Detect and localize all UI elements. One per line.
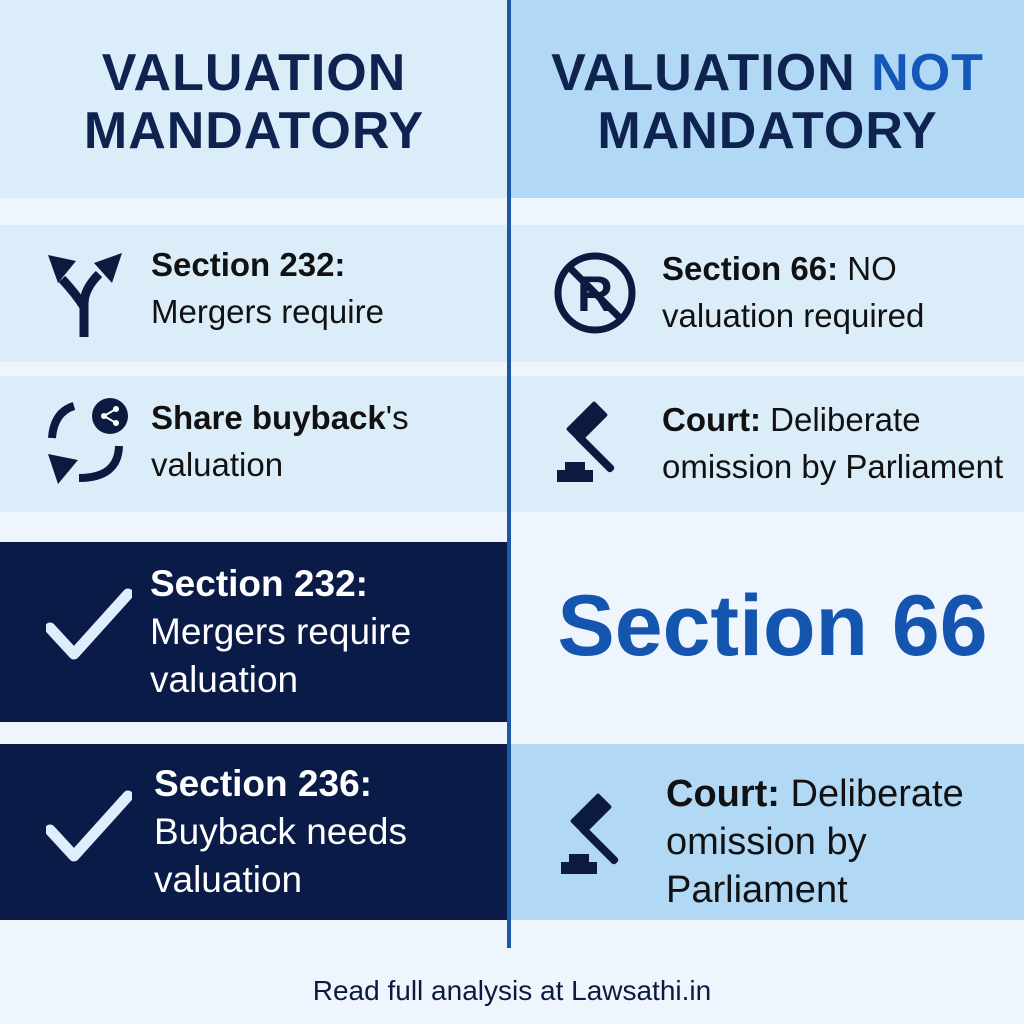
text: section 232 mergers — [150, 563, 411, 700]
text: court deliberate omission — [666, 773, 964, 911]
heading: big section 66: Section 66 — [557, 578, 988, 674]
text: section 232 mergers: Mergers require — [150, 611, 411, 652]
text: section 232: Section 232: — [151, 246, 345, 283]
title: valuation mandatory: MANDATORY — [84, 102, 424, 160]
text: court deliberate omission: Court: Deliberate — [666, 773, 964, 815]
text: share buyback: valuation — [151, 446, 283, 483]
panel: left row 1 — [0, 225, 508, 362]
text: section 236 buyback: Buyback needs — [154, 811, 407, 852]
panel: left header — [0, 0, 508, 198]
panel: right row 4 — [511, 744, 1024, 920]
text: share buyback — [151, 399, 409, 483]
icon: fork arrows — [48, 253, 122, 337]
text: section 66 no valuation — [662, 250, 924, 334]
title: valuation not mandatory: VALUATION NOT — [551, 44, 984, 102]
icon: checkmark — [46, 790, 132, 862]
text: court deliberate omission: Court: Deliberate — [662, 401, 921, 438]
panel: left dark row 2 — [0, 744, 508, 920]
panel: left dark row 1 — [0, 542, 508, 722]
panel: right row 1 — [511, 225, 1024, 362]
panel: left row 2 — [0, 376, 508, 512]
text: section 232 mergers: Section 232: — [150, 563, 368, 604]
icon: share cycle — [48, 398, 128, 484]
icon: gavel — [557, 402, 614, 482]
icon: no P sign: R — [577, 266, 613, 322]
text: court deliberate omission: omission by — [666, 821, 867, 863]
title: valuation not mandatory: MANDATORY — [597, 102, 938, 160]
text: section 66 no valuation: valuation required — [662, 297, 924, 334]
panel: right header — [511, 0, 1024, 198]
divider line — [507, 0, 511, 948]
icon: gavel — [561, 794, 618, 874]
text: section 66 no valuation: Section 66: NO — [662, 250, 897, 287]
title: valuation not mandatory — [551, 44, 984, 160]
text: court deliberate omission: Parliament — [666, 869, 848, 911]
icon: checkmark — [46, 588, 132, 660]
text: court deliberate omission: omission by Parliament — [662, 448, 1003, 485]
icon: no P sign — [554, 252, 636, 334]
text: section 232 — [151, 246, 384, 330]
text: section 236 buyback: valuation — [154, 859, 302, 900]
panel: right row 2 — [511, 376, 1024, 512]
title: valuation mandatory: VALUATION — [102, 44, 406, 102]
text: section 236 buyback: Section 236: — [154, 763, 372, 804]
text: section 232 mergers: valuation — [150, 659, 298, 700]
text: section 236 buyback — [154, 763, 407, 900]
text: court deliberate omission — [662, 401, 1003, 485]
text: section 232: Mergers require — [151, 293, 384, 330]
text: share buyback: Share buyback's — [151, 399, 409, 436]
footer text: Read full analysis at Lawsathi.in — [313, 975, 711, 1006]
title: valuation mandatory — [84, 44, 424, 160]
